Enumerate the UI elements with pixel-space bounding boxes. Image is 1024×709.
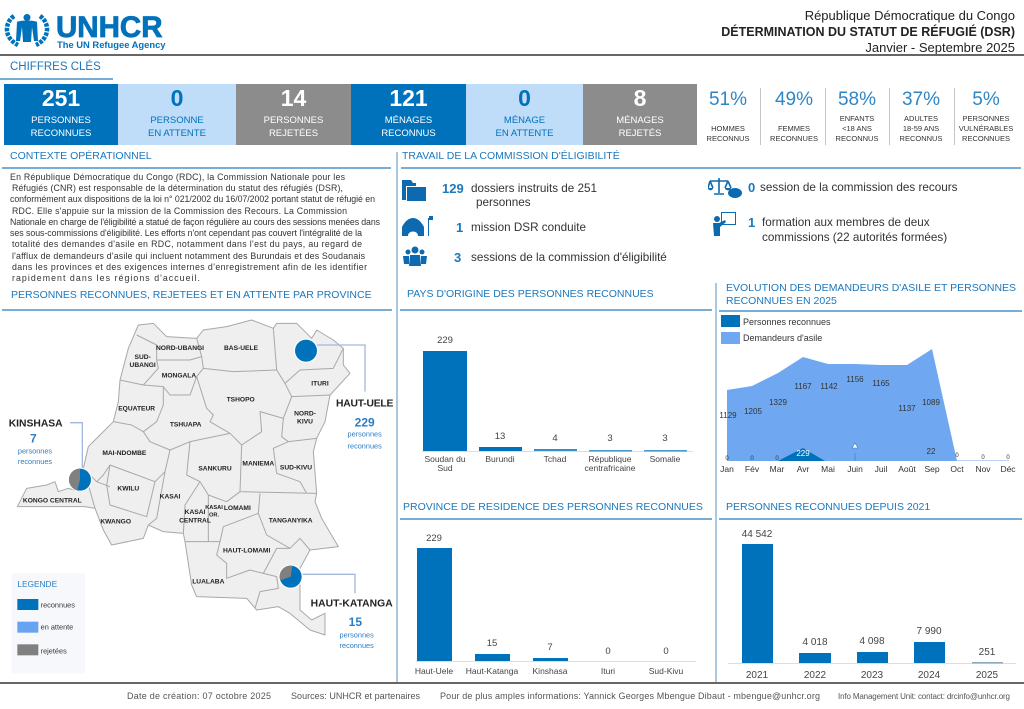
heading: province de résidence: PROVINCE DE RESIDENCE DES PERSONNES RECONNUES [403,501,703,513]
stat: personnes vulnérables: RECONNUES [962,134,1010,143]
province labels: MAI-NDOMBE [102,450,147,457]
text block: contexte: l'afflux de demandeurs d'asile qui incluent notamment des Burundais et des Soudanais [12,251,366,261]
kpi: ménages rejetés: 8 [634,85,646,111]
bar: Burundi [479,431,522,464]
heading: contexte opérationnel: CONTEXTE OPÉRATIONNEL [10,150,152,162]
stat: enfants: 58% [838,89,876,110]
pie: Haut-Uele [294,338,318,363]
month axis: Avr [797,464,809,474]
kpi: personnes rejetées: PERSONNES [264,115,323,126]
icon: UNHCR laurel and refugee figure [4,14,50,47]
icon: group of people [403,246,427,266]
kpi: personnes reconnues: 251 [42,85,80,111]
bar: 2023 [857,636,888,681]
month axis: Mar [770,464,784,474]
footer: Date de création: 07 octobre 2025 [127,691,271,701]
icon: mission tent [402,216,433,236]
kpi: ménages reconnus: 121 [389,85,428,111]
text block: contexte: ses sous-commissions d'éligibilité. Les efforts n'ont cependant pas couvert l'intégralité de la [10,228,362,238]
month axis: Juil [875,464,887,474]
report title [721,8,1015,55]
stat: hommes: 51% [709,89,747,110]
data labels: 1142 [820,382,838,391]
bar: République centrafricaine: 3 [607,433,613,444]
bar: 2024: 7 990 [916,626,942,637]
legend: reconnues [41,600,75,609]
stat: enfants [836,89,878,143]
month axis: Août [898,464,916,474]
item: dossiers instruits: dossiers instruits de 251 [471,182,597,195]
stat: enfants: ENFANTS [840,114,874,123]
kpi: personnes reconnues: PERSONNES [31,115,91,126]
province labels: NORD-UBANGI [156,345,204,352]
stat: adultes: ADULTES [904,114,938,123]
province labels: HAUT-LOMAMI [223,547,270,554]
stat: femmes: RECONNUES [770,134,818,143]
province labels: UBANGI [130,362,156,369]
callout: Haut-Uele: HAUT-UELE [336,399,393,410]
bar: Kinshasa: 7 [547,642,553,653]
report title: République Démocratique du Congo [805,8,1015,23]
bar: Sud-Kivu [649,646,684,676]
kpi: ménages rejetés: REJETÉS [619,128,661,139]
kpi: personne en attente: PERSONNE [150,115,204,126]
bar: République centrafricaine [584,433,636,473]
text block: contexte: rapidement dans les régions d'accueil. [12,273,200,283]
bar: Soudan du Sud: 229 [437,335,453,346]
stat: personnes vulnérables [958,89,1013,143]
month axis: Sep [924,464,940,474]
bar chart: pays d'origine [422,335,693,473]
province labels: MONGALA [162,373,196,380]
data labels: 0 [955,453,959,459]
stat: adultes [900,89,942,143]
callout: Kinshasa: 7 [30,431,37,445]
kpi: personnes rejetées: 14 [281,85,306,111]
month axis: Mai [821,464,835,474]
bar: Tchad: Tchad [544,454,567,464]
report title: DÉTERMINATION DU STATUT DE RÉFUGIÉ (DSR) [721,25,1015,39]
province labels: KIVU [297,418,313,425]
kpi: ménages reconnus: MÉNAGES [385,115,432,126]
footer [127,691,1010,701]
spike: juin [852,443,858,461]
bar: 2021 [742,529,773,681]
kpi: ménage en attente [466,84,583,145]
bar: Haut-Uele: 229 [426,533,442,544]
icon: folder [402,180,426,201]
stat: personnes vulnérables: 5% [972,89,1000,110]
stat: personnes vulnérables: PERSONNES [962,114,1010,123]
area: personnes reconnues [778,448,825,461]
kpi: personne en attente: 0 [171,85,183,111]
month axis: Oct [950,464,964,474]
bar: Haut-Katanga: Haut-Katanga [466,666,518,676]
item: mission DSR: mission DSR conduite [471,221,586,234]
footer: Info Management Unit: contact: drcinfo@unhcr.org [838,692,1010,701]
province labels: MANIEMA [242,461,274,468]
data labels: 1129 [719,411,737,420]
callout: Kinshasa: KINSHASA [9,418,63,429]
bar: Ituri [601,646,615,676]
text block: contexte: totalité des demandes d'asile en RDC, notamment dans l'est du pays, au regard de [12,239,362,249]
callout: Kinshasa [9,418,63,466]
legend: LEGENDE [17,579,58,589]
stat: hommes [707,89,750,143]
text block: contexte: Nationale en charge de l'éligibilité a statué de façon régulière au cours des sessions menées dans [10,217,381,227]
pie: Haut-Katanga [278,564,303,589]
data labels: 1165 [872,379,890,388]
wordmark: UNHCR [56,11,163,44]
kpi: ménage en attente: MÉNAGE [504,115,545,126]
bar: Kinshasa [533,642,568,676]
bar: 2023: 4 098 [859,636,885,647]
month axis [720,464,1016,474]
legend [12,573,85,673]
item: commission des recours: 0 [748,180,755,195]
month axis: Nov [975,464,991,474]
text block: contexte: dans les provinces et des exigences internes d'enregistrement afin de les identifier [12,262,367,272]
bar: Haut-Katanga: 15 [487,638,497,649]
month axis: Déc [1000,464,1016,474]
area: demandeurs d'asile [727,349,957,461]
province labels: KASAI [160,493,181,500]
stat: femmes: 49% [775,89,813,110]
bar chart: province de résidence [415,533,696,676]
bar: République centrafricaine: République [588,454,632,464]
heading: pays d'origine: PAYS D'ORIGINE DES PERSONNES RECONNUES [407,288,654,300]
stat: femmes: FEMMES [778,124,810,133]
province labels: OR. [209,513,219,519]
bar: Haut-Uele: Haut-Uele [415,666,453,676]
kpi: ménages rejetés: MÉNAGES [616,115,664,126]
stat: femmes [770,89,818,143]
province labels [23,345,329,585]
item: formation: commissions (22 autorités formées) [762,231,947,244]
kpi: personne en attente: EN ATTENTE [148,128,206,139]
callout: Haut-Uele: 229 [355,415,375,429]
text block: contexte: Réfugiés (CNR) est responsable de la détermination du statut des réfugiés (DSR), [12,183,343,193]
bar chart: depuis 2021 [728,529,1016,680]
data labels: 0 [775,456,779,462]
item: formation: formation aux membres de deux [762,216,930,229]
province labels: KWANGO [100,518,131,525]
data labels: 1137 [898,404,916,413]
item: dossiers instruits [442,181,597,209]
item: sessions éligibilité: 3 [454,250,461,265]
stat: personnes vulnérables: VULNÉRABLES [959,124,1013,133]
logo: UNHCR [4,11,166,50]
callout: Kinshasa: reconnues [18,457,52,466]
heading: personnes reconnues depuis 2021: PERSONNES RECONNUES DEPUIS 2021 [726,501,930,513]
legend: en attente [41,623,73,632]
province labels: SUD-KIVU [280,465,312,472]
data labels: 0 [1006,455,1010,461]
province labels: ITURI [311,381,329,388]
heading: chiffres clés: CHIFFRES CLÉS [10,61,101,73]
text block: contexte: En République Démocratique du Congo (RDC), la Commission Nationale pour les [10,172,346,182]
legend: rejetées [41,646,67,655]
kpi: personnes reconnues: RECONNUES [31,128,91,139]
bar: Tchad [534,433,577,464]
callout: Haut-Katanga: HAUT-KATANGA [311,598,393,609]
callout: Haut-Uele: reconnues [348,442,382,451]
kpi: personnes rejetées [236,84,351,145]
kpi: ménages reconnus [351,84,466,145]
bar: 2025 [972,647,1003,681]
province labels: EQUATEUR [118,406,155,413]
tagline: The UN Refugee Agency [57,39,166,50]
chart legend: Personnes reconnues [743,317,831,327]
province labels: SUD- [135,354,151,361]
bar: République centrafricaine: centrafricaine [584,463,636,473]
kpi: ménage en attente: EN ATTENTE [496,128,553,139]
bar: Soudan du Sud: Sud [437,463,453,473]
item: formation [748,215,947,244]
item: formation: 1 [748,215,755,230]
kpi: personne en attente [118,84,236,145]
bar: Soudan du Sud [423,335,467,473]
data labels: 1089 [922,398,940,407]
callout: Haut-Katanga: personnes [340,630,374,639]
chart legend [721,315,831,344]
bar: Haut-Katanga [466,638,518,676]
bar: 2021: 44 542 [742,529,773,540]
data labels: 229 [796,449,810,458]
month axis: Jan [720,464,734,474]
bar: Sud-Kivu: 0 [663,646,669,657]
province labels: NORD- [294,411,316,418]
province labels: LOMAMI [224,505,251,512]
data labels: 0 [725,456,729,462]
text block: contexte: RDC. Elle s'appuie sur la mission de la Commission des Recours. La Commission [12,206,347,216]
stat: adultes: RECONNUS [900,134,942,143]
callout: Haut-Katanga [311,598,393,650]
bar: Soudan du Sud: Soudan du [424,454,466,464]
province labels: LUALABA [192,578,225,585]
item: mission DSR: 1 [456,220,463,235]
bar: 2022 [799,637,831,681]
heading: évolution: RECONNUES EN 2025 [726,295,837,307]
icon: trainer with board [713,212,736,236]
icon: scales [708,178,742,198]
province labels: TSHUAPA [170,421,202,428]
text block: contexte: conformément aux dispositions de la loi n° 021/2002 du 16/07/2002 portant statut de réfugié en [10,194,375,204]
month axis: Juin [847,464,863,474]
province labels: TANGANYIKA [269,517,313,524]
bar: Ituri: Ituri [601,666,615,676]
bar: Burundi: 13 [495,431,505,442]
item: dossiers instruits: 129 [442,181,464,196]
bar: 2025: 251 [979,647,996,658]
callout: Haut-Katanga: 15 [349,615,362,629]
text block: contexte [10,172,381,283]
bar: Haut-Uele [415,533,453,676]
data labels: 1167 [794,382,812,391]
province labels: BAS-UELE [224,345,259,352]
kpi: ménage en attente: 0 [518,85,531,111]
province labels: KWILU [117,486,139,493]
province labels: KASAI [205,505,223,511]
callout: Haut-Uele [336,399,393,451]
bar: Ituri: 0 [605,646,611,657]
bar: Somalie: Somalie [650,454,681,464]
bar: Sud-Kivu: Sud-Kivu [649,666,684,676]
bar: 2022: 4 018 [802,637,828,648]
bar: Somalie [644,433,687,464]
stat: enfants: <18 ANS [842,124,872,133]
chart legend: Demandeurs d'asile [743,333,822,343]
stat: adultes: 18-59 ANS [903,124,939,133]
province labels: SANKURU [198,466,232,473]
province labels: TSHOPO [227,396,255,403]
pie: Kinshasa [68,467,92,492]
footer: Sources: UNHCR et partenaires [291,691,420,701]
stat: adultes: 37% [902,89,940,110]
heading: évolution: EVOLUTION DES DEMANDEURS D'ASILE ET PERSONNES [726,282,1016,294]
heading: travail de la commission: TRAVAIL DE LA COMMISSION D'ÉLIGIBILITÉ [402,150,620,162]
item: commission des recours: session de la commission des recours [760,181,957,194]
kpi: ménages reconnus: RECONNUS [381,128,436,139]
bar: Burundi: Burundi [485,454,515,464]
bar: 2024 [914,626,945,681]
data labels: 0 [750,456,754,462]
kpi: ménages rejetés [583,84,697,145]
callout: Kinshasa: personnes [18,446,52,455]
data labels: 1205 [744,407,762,416]
bar: Somalie: 3 [662,433,668,444]
province labels: KASAI [185,509,206,516]
kpi: personnes rejetées: REJETÉES [269,128,318,139]
kpi: personnes reconnues [4,84,118,145]
country outline [17,320,350,635]
month axis: Fév [745,464,760,474]
data labels: 1156 [846,375,864,384]
stat: hommes: HOMMES [711,124,745,133]
area chart: évolution 2025 [719,315,1016,474]
footer: Pour de plus amples informations: Yannick Georges Mbengue Dibaut - mbengue@unhcr.org [440,691,820,701]
heading: personnes par province: PERSONNES RECONNUES, REJETEES ET EN ATTENTE PAR PROVINCE [11,289,372,301]
bar: Kinshasa: Kinshasa [533,666,568,676]
province labels: CENTRAL [179,517,211,524]
data labels: 0 [981,455,985,461]
heading: évolution [726,282,1016,307]
stat: enfants: RECONNUS [836,134,878,143]
connector lines [70,345,365,593]
report title: Janvier - Septembre 2025 [865,40,1015,55]
callout: Haut-Katanga: reconnues [340,641,374,650]
province labels: KONGO CENTRAL [23,497,82,504]
stat: hommes: RECONNUS [707,134,749,143]
data labels [719,375,1010,462]
bar: Tchad: 4 [552,433,558,444]
data labels: 22 [927,447,936,456]
map: provinces of DRC [9,320,393,673]
callout: Haut-Uele: personnes [348,430,382,439]
item: sessions éligibilité: sessions de la commission d'éligibilité [471,251,667,264]
item: dossiers instruits: personnes [476,196,531,209]
data labels: 1329 [769,398,787,407]
